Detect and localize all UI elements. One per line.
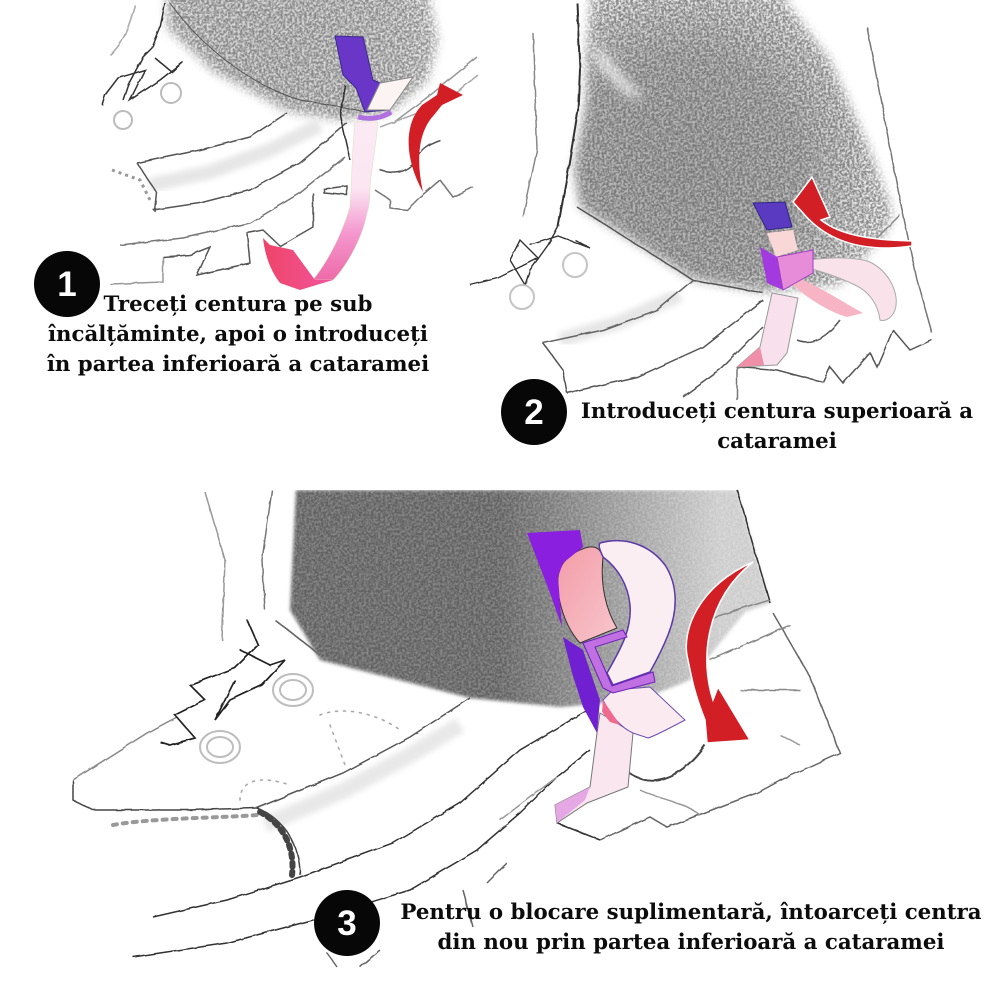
boot 2 fabric texture [560, 0, 910, 300]
boot 3 laces [160, 620, 320, 745]
text: step 1: în partea inferioară a cataramei [47, 352, 429, 377]
text: step 3: Pentru o blocare suplimentară, întoarceți centra [400, 900, 982, 925]
number badge 2: 2 [524, 393, 544, 432]
text: step 2: Introduceți centura superioară a [581, 399, 973, 424]
text: step 2: cataramei [717, 429, 837, 454]
text: step 1: încălțăminte, apoi o introduceți [48, 322, 428, 347]
boot 3 perforations [113, 711, 400, 875]
red arrow 3 [686, 562, 753, 743]
boot 1 line art [110, 3, 478, 284]
boot 2 line art [523, 3, 932, 400]
boot 1 toe band shading [150, 125, 320, 185]
text: step 1: Treceți centura pe sub [104, 292, 372, 317]
boot 1 laces [102, 3, 183, 105]
number badge 1 [34, 251, 100, 317]
number badge 3 [314, 890, 380, 956]
text: step 2 [581, 399, 973, 454]
text: step 3: din nou prin partea inferioară a cataramei [438, 930, 944, 955]
boot 2 toe band shading [560, 295, 680, 340]
boot 2 white streak [592, 40, 645, 100]
number badge 2 [501, 379, 567, 445]
boot 3 fabric texture [285, 490, 775, 715]
panel 2: boot illustration [470, 0, 932, 400]
boot 3 line art [73, 490, 840, 967]
red arrow 1 [409, 83, 463, 192]
boot 2 laces [470, 227, 590, 285]
boot 1 fabric texture [150, 0, 450, 130]
panel 3: boot illustration [73, 490, 840, 967]
number badge 3: 3 [337, 904, 357, 943]
buckle 3 [527, 530, 655, 733]
boot 1 eyelets [114, 83, 181, 129]
boot 3 toe band shading [265, 725, 460, 825]
text: step 3 [400, 900, 982, 955]
number badge 1: 1 [57, 265, 77, 304]
boot 2 eyelets [510, 253, 587, 309]
strap 1: loop under the boot [263, 122, 378, 290]
boot 3 eyelets [200, 674, 313, 763]
buckle 1 [335, 36, 413, 118]
boot 1 toecap perforations [112, 170, 150, 200]
strap 2 [737, 258, 896, 367]
text: step 1 [47, 292, 429, 377]
red arrow 2 [793, 177, 912, 248]
panel 1: boot illustration [102, 0, 478, 290]
buckle 2 [753, 202, 813, 290]
strap 3 [555, 541, 685, 823]
